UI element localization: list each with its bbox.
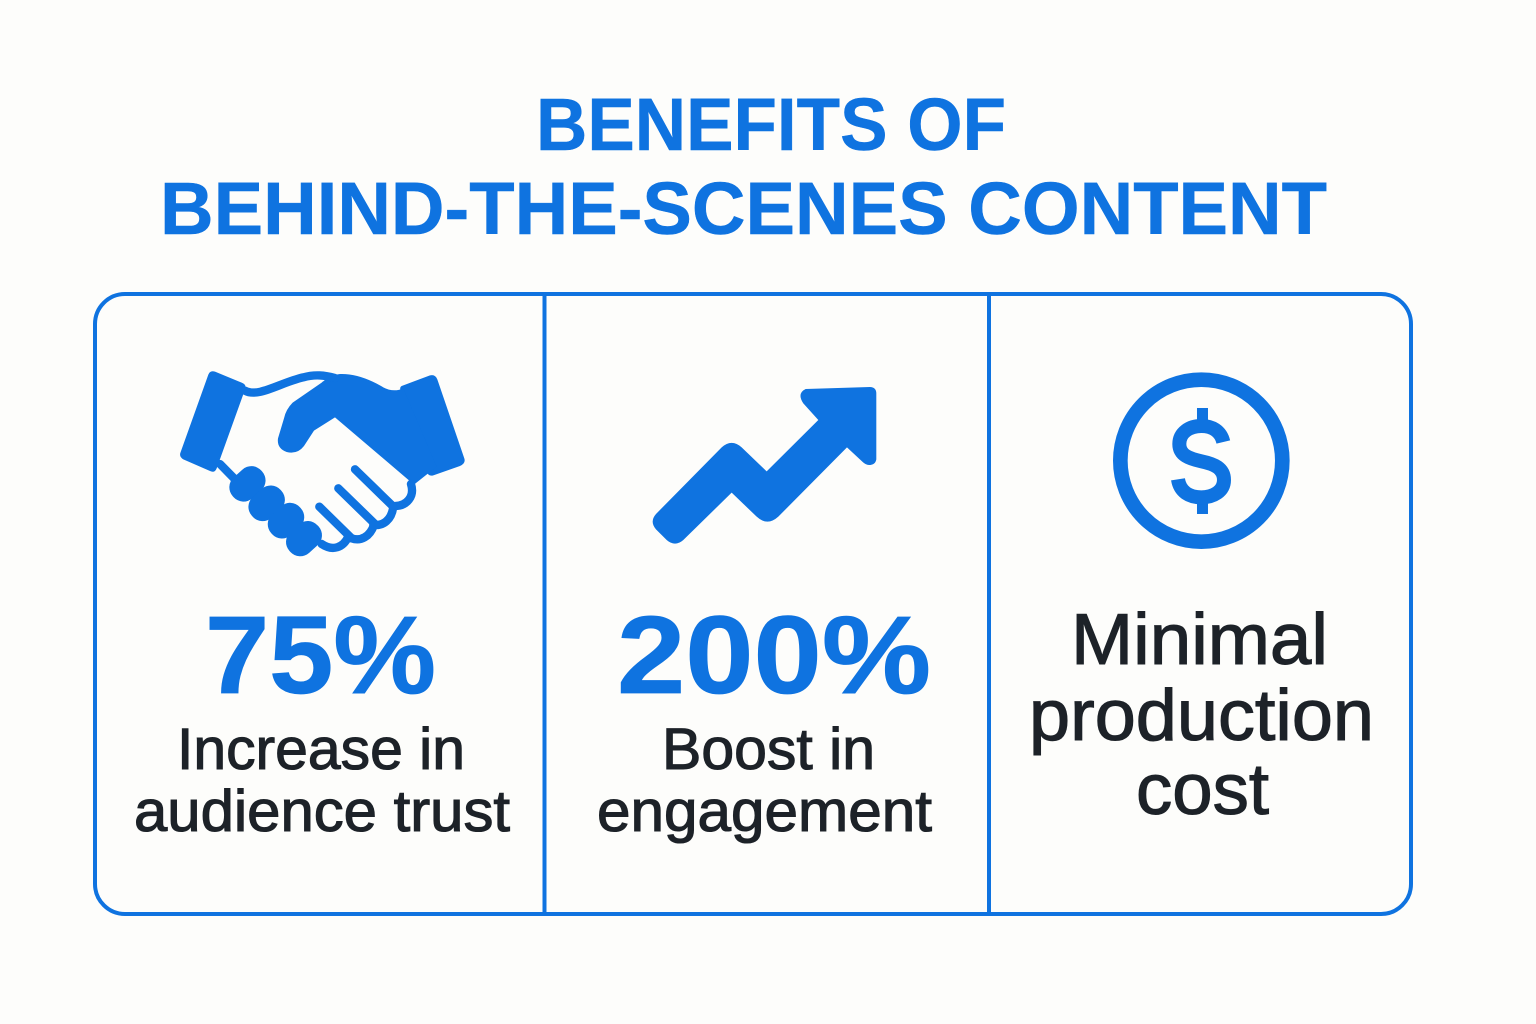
title: BENEFITS OF <box>536 83 1006 166</box>
title: BEHIND-THE-SCENES CONTENT <box>160 167 1327 250</box>
stat: 200%: 200% <box>617 594 931 717</box>
text: minimal production cost: Minimal <box>1071 600 1328 680</box>
text: boost in engagement: engagement <box>597 779 932 844</box>
text: minimal production cost: production <box>1029 676 1374 756</box>
panel: audience trust <box>95 294 544 914</box>
text: boost in engagement: Boost in <box>662 717 875 782</box>
text: minimal production cost <box>1029 600 1374 830</box>
text: increase in audience trust <box>134 717 510 844</box>
stat: 75%: 75% <box>205 594 436 717</box>
panel frame <box>95 294 1411 914</box>
panel: engagement <box>544 294 989 914</box>
text: increase in audience trust: audience trust <box>134 779 510 844</box>
text: increase in audience trust: Increase in <box>177 717 465 782</box>
icon: dollar coin <box>1120 380 1282 542</box>
text: boost in engagement <box>597 717 932 844</box>
icon: rising arrow <box>653 387 876 544</box>
panel: production cost <box>989 294 1411 914</box>
title <box>160 83 1327 250</box>
text: minimal production cost: cost <box>1136 750 1269 830</box>
icon: handshake <box>180 371 465 562</box>
